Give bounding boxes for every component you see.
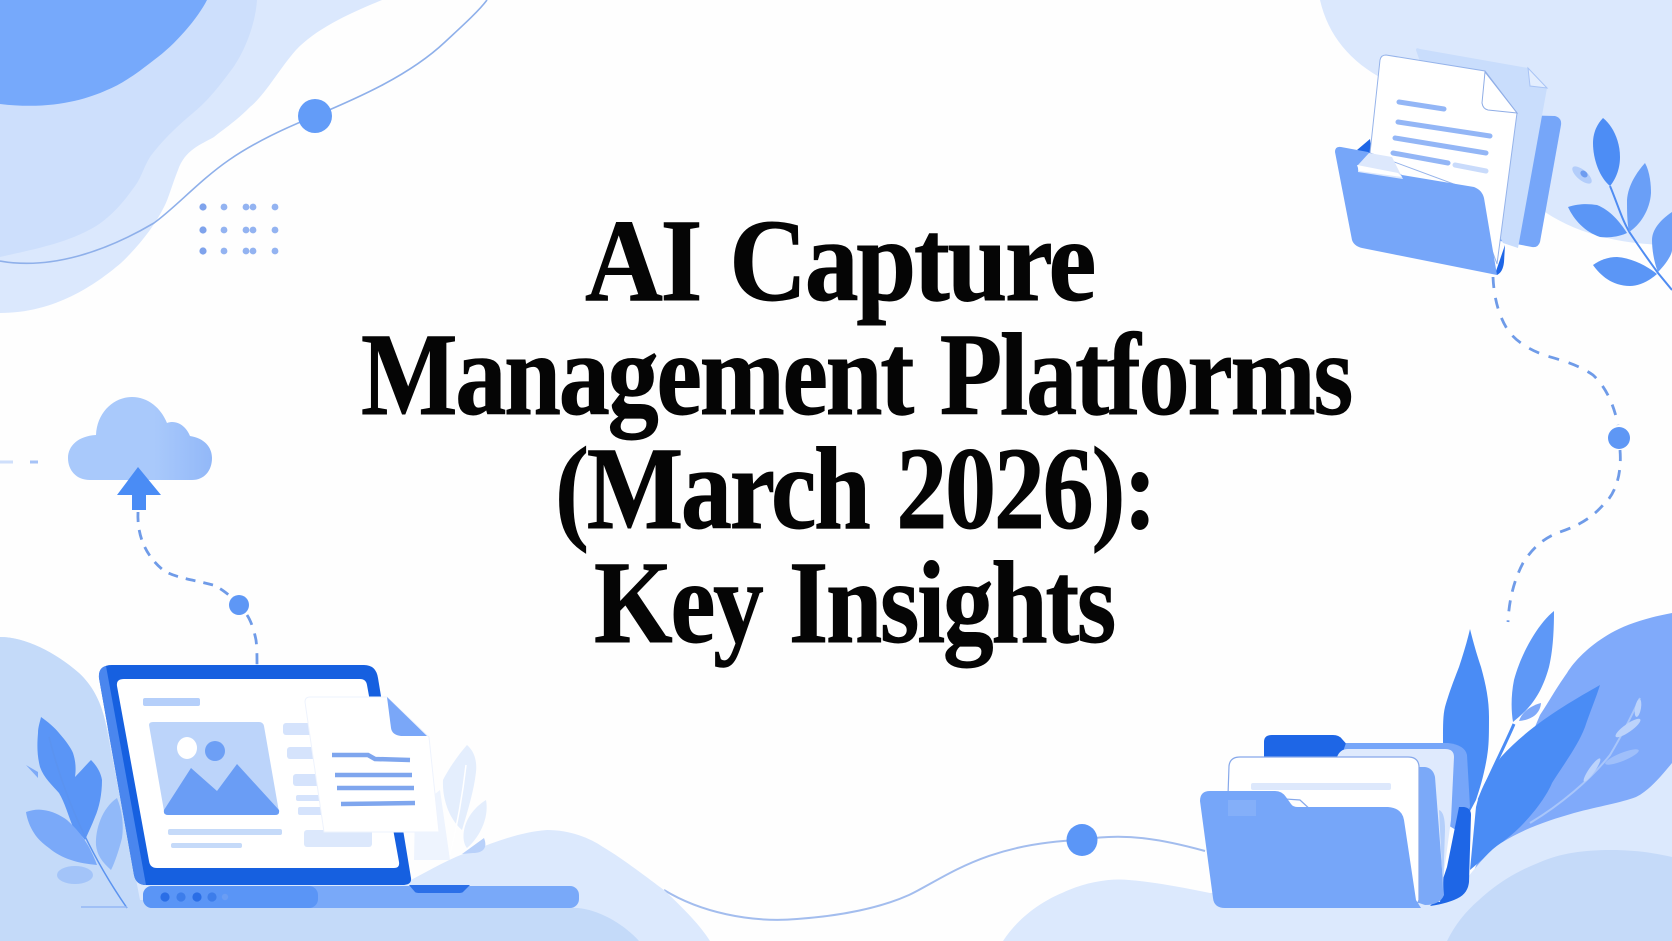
title: (March 2026): [555,423,1155,554]
top-left background blobs [0,0,382,313]
document text lines [1393,102,1490,171]
document text lines [332,755,415,804]
top-left connector line with node [0,0,487,263]
side bars behind document [283,723,372,847]
image placeholder [149,722,279,815]
title: AI Capture [585,195,1094,326]
title: Key Insights [594,537,1115,668]
icon: folder with sheets [1200,735,1471,908]
folder dark tab [1264,735,1350,757]
top-right leaf sprig [1568,118,1672,290]
icon: open folder with documents [1335,48,1561,275]
title [361,195,1352,668]
dot grid [199,203,278,255]
bottom-left plant [26,717,127,908]
laptop base [143,885,579,908]
dashed connector right with node [1493,277,1630,622]
left horizontal dashes [0,460,38,464]
faint plant behind laptop [414,745,487,860]
caption bars [168,829,282,848]
bottom-middle connector line with node [664,824,1205,920]
bottom-left background blobs [0,637,710,941]
icon: cloud upload [68,397,212,510]
title: Management Platforms [361,309,1352,440]
screen heading bar [143,698,200,706]
floating document over laptop [305,697,439,832]
bottom-right foliage [1443,611,1600,870]
faint twig on blob [1530,698,1643,823]
bottom-right dark blob behind leaves [1470,613,1672,880]
top-right background blob [1320,0,1672,245]
dashed connector left with node [138,512,257,665]
base indicator dots [160,892,228,902]
laptop screen [99,665,411,885]
bottom-right background blobs [1003,763,1672,941]
